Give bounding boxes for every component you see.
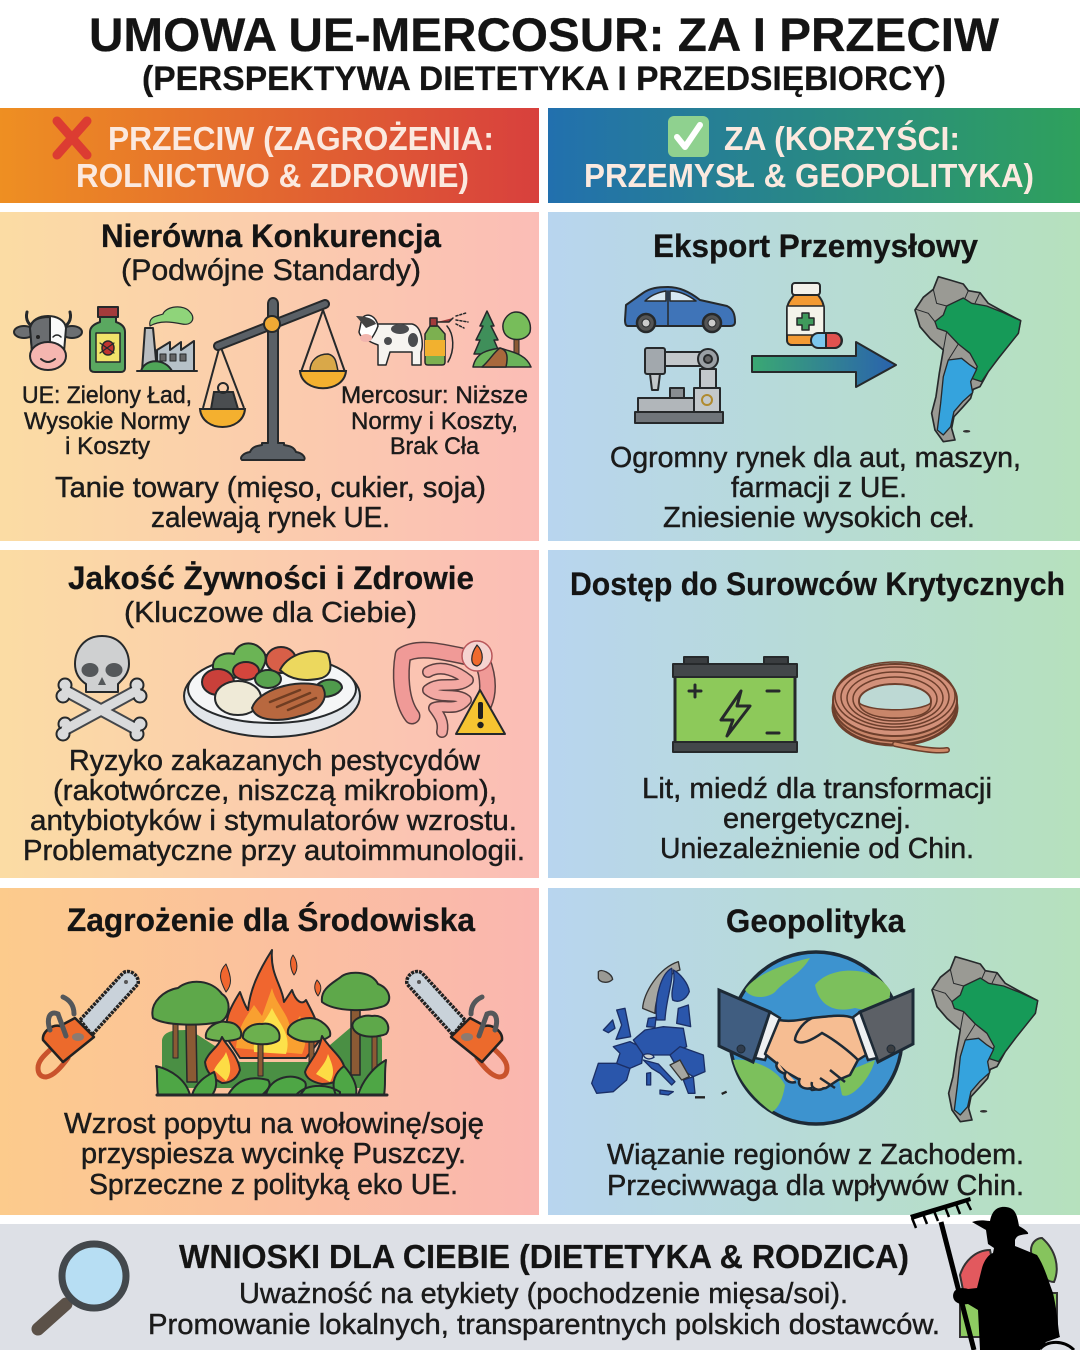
icon: green check (668, 116, 709, 157)
text: UE: UE: Zielony Ład, (22, 382, 192, 409)
icon: intestines (401, 641, 505, 734)
arrow: export (752, 342, 896, 387)
heading: WNIOSKI DLA CIEBIE (DIETETYKA & RODZICA) (179, 1238, 909, 1275)
heading: Eksport Przemysłowy (653, 228, 978, 264)
icon: copper coil (833, 662, 957, 751)
header: przeciw (0, 108, 539, 203)
subheading: (Podwójne Standardy) (121, 254, 421, 287)
icon: farmer silhouette (910, 1197, 1074, 1350)
icon: cow head (14, 312, 82, 370)
panel: jakość żywności (0, 550, 539, 878)
panel: surowce krytyczne (548, 550, 1080, 878)
icon: battery (673, 657, 797, 752)
body text: Problematyczne przy autoimmunologii. (23, 835, 525, 867)
body text (64, 1108, 484, 1201)
body text (607, 1139, 1024, 1202)
title: (PERSPEKTYWA DIETETYKA I PRZEDSIĘBIORCY) (142, 60, 946, 98)
icon: dairy cow (356, 315, 422, 365)
icon: skull and bones (56, 636, 146, 740)
text: Mercosur: Mercosur: Niższe (341, 382, 528, 409)
panel: wnioski (0, 1197, 1080, 1350)
body text: zalewają rynek UE. (151, 502, 390, 534)
icon: chainsaw left (38, 971, 138, 1077)
text: Mercosur: Brak Cła (390, 433, 479, 460)
icon: car (625, 287, 735, 332)
icon: forest fire (152, 950, 389, 1095)
icon: factory (137, 307, 197, 371)
text: Mercosur: Normy i Koszty, (351, 408, 518, 435)
body text: (rakotwórcze, niszczą mikrobiom), (53, 775, 497, 807)
icon: red cross (57, 121, 87, 155)
icon: medicine (787, 283, 842, 348)
heading: Zagrożenie dla Środowiska (67, 902, 475, 938)
panel: nierówna konkurencja (0, 212, 539, 541)
panel: geopolityka (548, 888, 1080, 1215)
body text: Uważność na etykiety (pochodzenie mięsa/soi). (239, 1278, 848, 1310)
subheading: (Kluczowe dla Ciebie) (124, 597, 417, 629)
text: UE: Wysokie Normy (24, 408, 191, 435)
icon: chainsaw right (407, 971, 507, 1077)
icon: globe with handshake (719, 952, 913, 1124)
body text: antybiotyków i stymulatorów wzrostu. (30, 805, 517, 837)
heading: Dostęp do Surowców Krytycznych (570, 566, 1065, 602)
body text (23, 745, 525, 867)
body text (610, 442, 1021, 534)
body text (148, 1278, 940, 1341)
map: South America (915, 277, 1021, 442)
header: za: PRZEMYSŁ & GEOPOLITYKA) (584, 157, 1034, 194)
panel: eksport przemysłowy (548, 212, 1080, 541)
body text: Ogromny rynek dla aut, maszyn, (610, 442, 1021, 474)
heading: Nierówna Konkurencja (101, 218, 441, 254)
text: UE: i Koszty (65, 433, 151, 460)
map: South America (932, 957, 1038, 1122)
icon: background farm (960, 1238, 1057, 1337)
text: UE (22, 382, 192, 460)
map: Europe (592, 962, 727, 1097)
heading: Geopolityka (726, 903, 905, 939)
icon: balance scale (200, 298, 346, 460)
body text: Lit, miedź dla transformacji (642, 773, 992, 805)
body text: Wzrost popytu na wołowinę/soję (64, 1108, 484, 1140)
body text (642, 773, 992, 865)
icon: food plate (184, 643, 360, 737)
body text: Sprzeczne z polityką eko UE. (89, 1169, 458, 1201)
body text: Wiązanie regionów z Zachodem. (607, 1139, 1024, 1171)
heading: Jakość Żywności i Zdrowie (68, 560, 474, 596)
header: przeciw: ROLNICTWO & ZDROWIE) (76, 157, 469, 194)
title (89, 8, 1000, 98)
title: UMOWA UE-MERCOSUR: ZA I PRZECIW (89, 8, 1000, 61)
body text: Ryzyko zakazanych pestycydów (69, 745, 481, 777)
body text: Uniezależnienie od Chin. (660, 833, 974, 865)
header: za (548, 108, 1080, 203)
body text: Tanie towary (mięso, cukier, soja) (55, 472, 486, 504)
body text: farmacji z UE. (731, 472, 907, 504)
text: Mercosur (341, 382, 528, 460)
header: przeciw: PRZECIW (ZAGROŻENIA: (108, 120, 494, 157)
icon: magnifying glass (38, 1244, 126, 1329)
header: za: ZA (KORZYŚCI: (724, 120, 960, 157)
icon: pesticide bottle (90, 307, 125, 372)
body text (55, 472, 486, 534)
panel: środowisko (0, 888, 539, 1215)
body text: przyspiesza wycinkę Puszczy. (81, 1138, 466, 1170)
icon: industrial machine (635, 348, 723, 423)
body text: Promowanie lokalnych, transparentnych polskich dostawców. (148, 1309, 940, 1341)
body text: energetycznej. (723, 803, 911, 835)
body text: Zniesienie wysokich ceł. (663, 502, 975, 534)
icon: trees and path (473, 311, 531, 367)
body text: Przeciwwaga dla wpływów Chin. (607, 1170, 1024, 1202)
icon: sprayer (425, 313, 468, 365)
